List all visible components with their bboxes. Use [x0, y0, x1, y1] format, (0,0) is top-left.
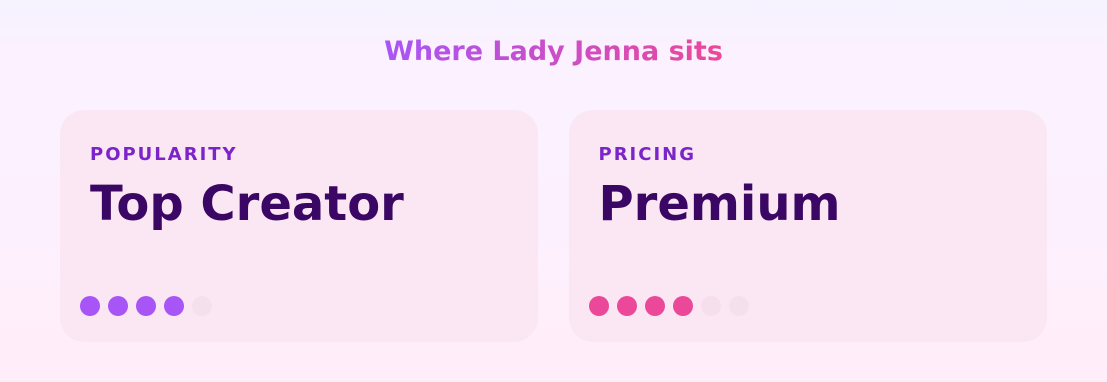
panel: pricing: [568, 110, 1046, 342]
pricing value: Premium: [598, 176, 841, 232]
pricing label: PRICING: [598, 144, 696, 165]
popularity rating dots: [80, 296, 184, 316]
pricing rating dots: [589, 296, 693, 316]
popularity value: Top Creator: [90, 176, 404, 232]
popularity label: POPULARITY: [90, 144, 238, 165]
title: Where Lady Jenna sits: [384, 36, 723, 67]
panel: popularity: [60, 110, 538, 342]
